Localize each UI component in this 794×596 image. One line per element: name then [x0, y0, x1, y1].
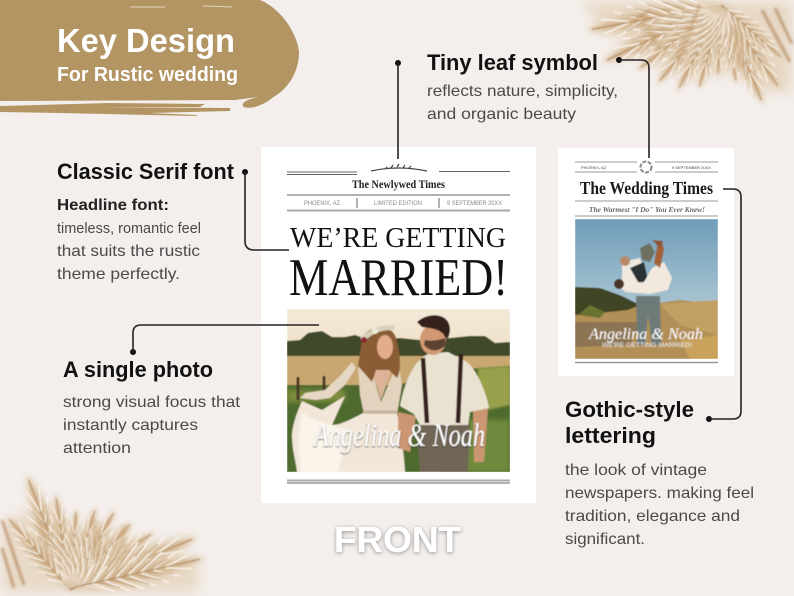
arrow: photo connector [130, 325, 319, 355]
callout: a single photo: attention [63, 440, 131, 457]
callout: classic serif font: Classic Serif font [57, 159, 235, 184]
callout: classic serif font [57, 159, 235, 283]
edition row [581, 165, 711, 170]
callout: classic serif font: timeless, romantic feel [57, 220, 201, 237]
bodice [358, 365, 402, 414]
arrow: serif font connector [242, 169, 289, 250]
hair and head [358, 328, 400, 382]
edition row: PHOENIX, AZ [581, 165, 607, 170]
arrow: masthead connector [395, 60, 401, 159]
couple [636, 296, 661, 345]
arrow: leaf connector [616, 57, 649, 158]
dress [292, 396, 405, 472]
title: Key Design [57, 22, 235, 59]
names: Angelina & Noah [588, 326, 703, 343]
masthead: The Wedding Times [580, 178, 713, 198]
edition row: LIMITED EDITION [374, 200, 422, 207]
callout: gothic-style lettering: significant. [565, 531, 645, 548]
callout: gothic-style lettering: tradition, elegance and [565, 508, 740, 525]
decoration: pampas grass top right [581, 0, 792, 111]
callout: tiny leaf symbol: reflects nature, simplicity, [427, 83, 618, 100]
photo: couple in field [287, 309, 510, 472]
edition row: PHOENIX, AZ [304, 200, 340, 207]
subtitle: For Rustic wedding [57, 64, 238, 86]
callout: classic serif font: Headline font: [57, 197, 169, 214]
masthead: The Newlywed Times [352, 177, 445, 191]
edition row [304, 200, 503, 207]
callout: gothic-style lettering: lettering [565, 423, 656, 448]
callout: gothic-style lettering: Gothic-style [565, 397, 694, 422]
title banner: brush stroke [0, 0, 299, 116]
callout: tiny leaf symbol: and organic beauty [427, 106, 576, 123]
panel: front newspaper page [261, 147, 536, 503]
headline: WE’RE GETTING [290, 222, 506, 254]
callout: a single photo: strong visual focus that [63, 394, 241, 411]
callout: a single photo: A single photo [63, 357, 213, 382]
callout: a single photo [63, 357, 241, 457]
callout: gothic-style lettering: the look of vintage [565, 462, 707, 479]
photo caption: WE'RE GETTING MARRIED! [602, 343, 692, 349]
callout: classic serif font: theme perfectly. [57, 266, 180, 283]
photo: couple dip pose [575, 219, 718, 359]
sleeve [300, 362, 356, 400]
arrow: gothic lettering connector [706, 189, 741, 422]
callout: tiny leaf symbol [427, 50, 618, 123]
edition row: 9 SEPTEMBER 20XX [447, 200, 503, 207]
tagline: The Warmest "I Do" You Ever Knew! [589, 205, 705, 214]
groom [416, 424, 470, 472]
callout: classic serif font: that suits the rustic [57, 243, 200, 260]
decoration: pampas grass bottom left [0, 467, 211, 596]
icon: leaf wreath [640, 162, 652, 172]
header rules [575, 162, 718, 216]
edition row: 9 SEPTEMBER 20XX [672, 165, 711, 170]
callout: a single photo: instantly captures [63, 417, 198, 434]
headline: MARRIED! [289, 249, 508, 307]
headline [289, 222, 508, 307]
callout: tiny leaf symbol: Tiny leaf symbol [427, 50, 598, 75]
panel: back newspaper page [558, 148, 734, 376]
names: Angelina & Noah [313, 418, 485, 454]
callout: gothic-style lettering: newspapers. making feel [565, 485, 754, 502]
callout: gothic-style lettering [565, 397, 754, 548]
header rules [287, 172, 510, 483]
label: front: FRONT [334, 519, 461, 560]
icon: leaf ornament [371, 164, 427, 171]
